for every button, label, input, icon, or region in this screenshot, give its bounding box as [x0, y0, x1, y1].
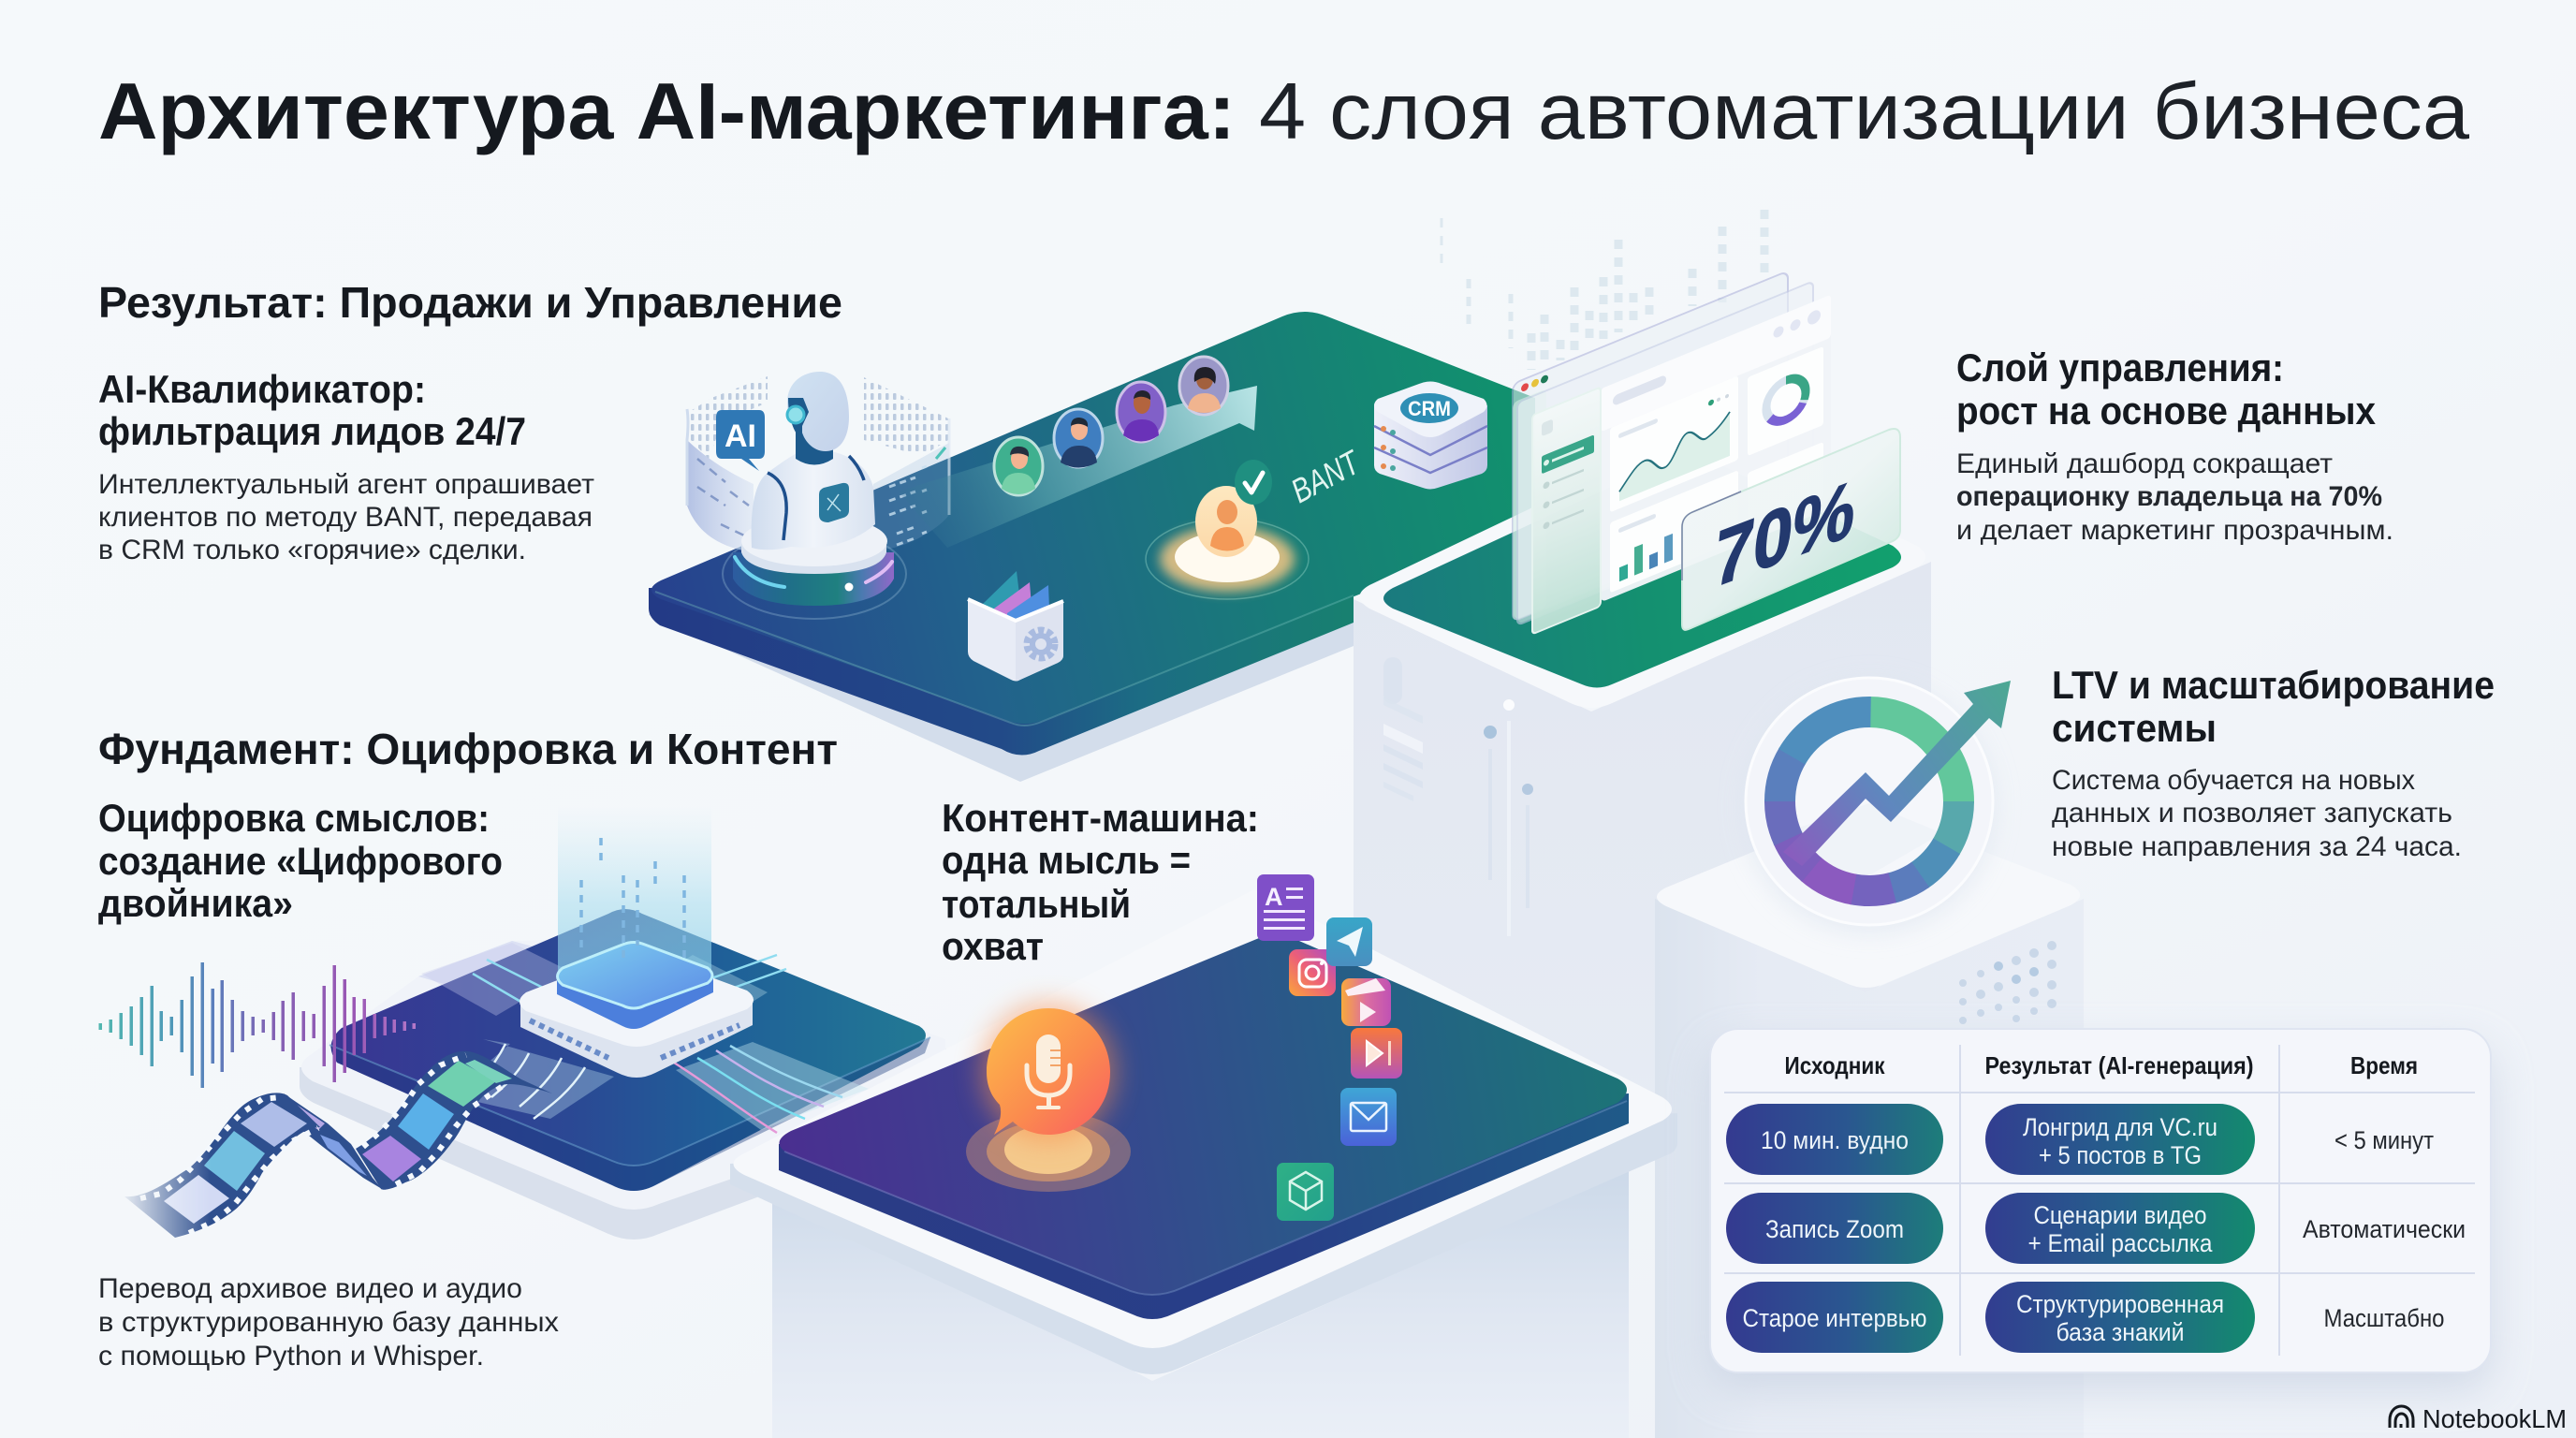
- icon: instagram: [1289, 949, 1336, 996]
- file box with gear: [968, 571, 1063, 682]
- icon: reels: [1351, 1028, 1402, 1078]
- text block: digitisation description: Перевод архивое видео и аудио: [98, 1273, 522, 1304]
- comparison table: [1710, 1029, 2491, 1389]
- table row 3: база знакий: [2056, 1318, 2185, 1346]
- table header: Исходник: [1784, 1051, 1885, 1079]
- text block: management layer: рост на основе данных: [1956, 389, 2377, 433]
- text block: digital twin heading: двойника»: [98, 881, 293, 925]
- pedestal decor: [1383, 657, 1533, 936]
- icon: longread: [1257, 874, 1314, 941]
- pedestal dot pattern: [1959, 941, 2056, 1024]
- green top face: [1383, 453, 1901, 687]
- hologram cylinder: [687, 376, 949, 552]
- CRM server stack: [1374, 382, 1487, 489]
- text block: AI qualifier: фильтрация лидов 24/7: [98, 409, 526, 453]
- film section one: [124, 1093, 320, 1238]
- BANT label: BANT: [1285, 442, 1368, 510]
- 70% glass card: 70%: [1710, 462, 1860, 605]
- film fold: [284, 1093, 382, 1189]
- table row 1: < 5 минут: [2334, 1126, 2434, 1154]
- text block: management layer: операционку владельца на 70%: [1956, 481, 2382, 512]
- table row 2: Автоматически: [2303, 1215, 2466, 1243]
- text block: management layer: Слой управления:: [1956, 345, 2284, 389]
- icon: telegram: [1326, 917, 1372, 966]
- light traces between tiles: [449, 1039, 614, 1119]
- arrow with leads: [899, 386, 1257, 548]
- avatar 2: [1054, 409, 1103, 468]
- text block: digitisation description: [98, 1273, 559, 1372]
- table header: Время: [2350, 1051, 2418, 1079]
- rising data streams: [581, 838, 684, 964]
- lead avatars: [994, 357, 1228, 495]
- robot AI agent: [716, 372, 906, 619]
- platform: foundation tiles: [329, 909, 930, 1191]
- plinth: foundation: [300, 936, 955, 1240]
- robot chest chip: [819, 483, 849, 522]
- table row 2: + Email рассылка: [2027, 1229, 2213, 1257]
- icon: longread: A: [1265, 883, 1282, 911]
- avatar 3: [1117, 382, 1165, 442]
- check badge: [1235, 460, 1272, 505]
- icon: email: [1340, 1088, 1397, 1146]
- CRM server stack: CRM: [1408, 397, 1451, 420]
- LTV pedestal: [1655, 809, 2084, 1438]
- pedestal: dashboard column: [1354, 562, 1931, 1161]
- table row 2: [1726, 1193, 2466, 1264]
- text block: LTV and scaling: Система обучается на новых: [2052, 765, 2415, 796]
- light beam over the chip: [558, 805, 711, 1002]
- dashboard glass panels: [1513, 254, 1831, 642]
- icon: LTV growth ring with arrow: [1743, 675, 2011, 931]
- text block: LTV and scaling: данных и позволяет запускать: [2052, 798, 2452, 829]
- film strip: [124, 1051, 552, 1238]
- text block: management layer: и делает маркетинг прозрачным.: [1956, 515, 2393, 546]
- robot base: [733, 552, 894, 606]
- platform: sales layer: [649, 312, 1535, 782]
- table row 3: [1726, 1282, 2445, 1353]
- block ports: [530, 1020, 739, 1058]
- channel icons: [1257, 874, 1402, 1221]
- avatar 4: [1179, 357, 1228, 415]
- icon: microphone bubble: [966, 1003, 1131, 1192]
- platform top face: [651, 312, 1535, 724]
- line chart card: [1610, 375, 1738, 512]
- pedestal under content plinth: [772, 1170, 1629, 1438]
- text block: LTV and scaling: LTV и масштабирование: [2052, 663, 2495, 707]
- table row 1: [1726, 1104, 2434, 1175]
- NotebookLM logo: NotebookLM: [2422, 1404, 2567, 1433]
- table row 2: Запись Zoom: [1765, 1215, 1904, 1243]
- section heading: result: Результат: Продажи и Управление: [98, 278, 842, 327]
- waveform: [99, 962, 416, 1088]
- table row 2: Сценарии видео: [2033, 1201, 2207, 1229]
- title: 4 слоя автоматизации бизнеса: [1259, 67, 2470, 156]
- text block: management layer: [1956, 345, 2393, 546]
- avatar 1: [994, 437, 1043, 495]
- platform thickness: [649, 580, 1354, 756]
- text block: digitisation description: в структурированную базу данных: [98, 1307, 559, 1338]
- 70% glass card: [1682, 429, 1900, 630]
- donut card: [1748, 346, 1823, 456]
- film section two: [356, 1051, 552, 1190]
- bar chart card: [1610, 470, 1738, 593]
- AI speech bubble: [716, 410, 765, 471]
- qualified lead on glowing disk: [1146, 460, 1309, 599]
- text block: management layer: Единый дашборд сокращает: [1956, 448, 2333, 479]
- robot neck and head: [796, 421, 833, 464]
- table row 3: Структурировенная: [2016, 1290, 2224, 1318]
- content pane: [1601, 295, 1831, 602]
- pedestal top: dashboard layer: [1359, 441, 1925, 708]
- table header: Результат (AI-генерация): [1984, 1051, 2254, 1079]
- text block: digital twin heading: Оцифровка смыслов:: [98, 796, 490, 840]
- section heading: foundation: Фундамент: Оцифровка и Контент: [98, 725, 838, 773]
- text block: digital twin heading: [98, 796, 503, 925]
- table row 1: + 5 постов в TG: [2039, 1141, 2202, 1169]
- text block: content machine: [942, 796, 1259, 968]
- icon: knowledge base: [1277, 1163, 1334, 1221]
- AI speech bubble: AI: [724, 418, 756, 454]
- blue chip: [557, 942, 713, 1029]
- robot torso: [752, 452, 875, 550]
- text block: digital twin heading: создание «Цифрового: [98, 839, 503, 883]
- text block: AI qualifier: [98, 367, 594, 565]
- table header: [1784, 1051, 2418, 1079]
- text block: AI qualifier: Интеллектуальный агент опрашивает: [98, 469, 594, 500]
- text block: AI qualifier: клиентов по методу BANT, передавая: [98, 502, 593, 533]
- table row 1: 10 мин. вудно: [1761, 1126, 1909, 1154]
- sidebar panel: [1532, 387, 1601, 634]
- central processor block: [520, 838, 754, 1078]
- plinth: content machine: [730, 889, 1677, 1374]
- text block: LTV and scaling: новые направления за 24 часа.: [2052, 831, 2462, 862]
- back panel: [1513, 271, 1788, 622]
- text block: content machine: Контент-машина:: [942, 796, 1259, 840]
- table row 3: Старое интервью: [1743, 1304, 1926, 1332]
- table row 1: Лонгрид для VC.ru: [2023, 1113, 2217, 1141]
- text block: LTV and scaling: системы: [2052, 706, 2217, 750]
- table row 3: Масштабно: [2323, 1304, 2445, 1332]
- text block: content machine: охват: [942, 924, 1044, 968]
- text block: AI qualifier: в CRM только «горячие» сделки.: [98, 535, 526, 565]
- text block: LTV and scaling: [2052, 663, 2495, 862]
- text block: digitisation description: с помощью Python и Whisper.: [98, 1341, 484, 1372]
- text block: AI qualifier: AI-Квалификатор:: [98, 367, 426, 411]
- text block: content machine: тотальный: [942, 882, 1131, 926]
- icon: video: [1341, 978, 1391, 1026]
- title: [98, 67, 2470, 156]
- title: Архитектура AI-маркетинга:: [98, 67, 1236, 156]
- data dots behind dashboard: [1442, 210, 1764, 370]
- platform: content machine: [779, 934, 1629, 1319]
- text block: content machine: одна мысль =: [942, 838, 1191, 882]
